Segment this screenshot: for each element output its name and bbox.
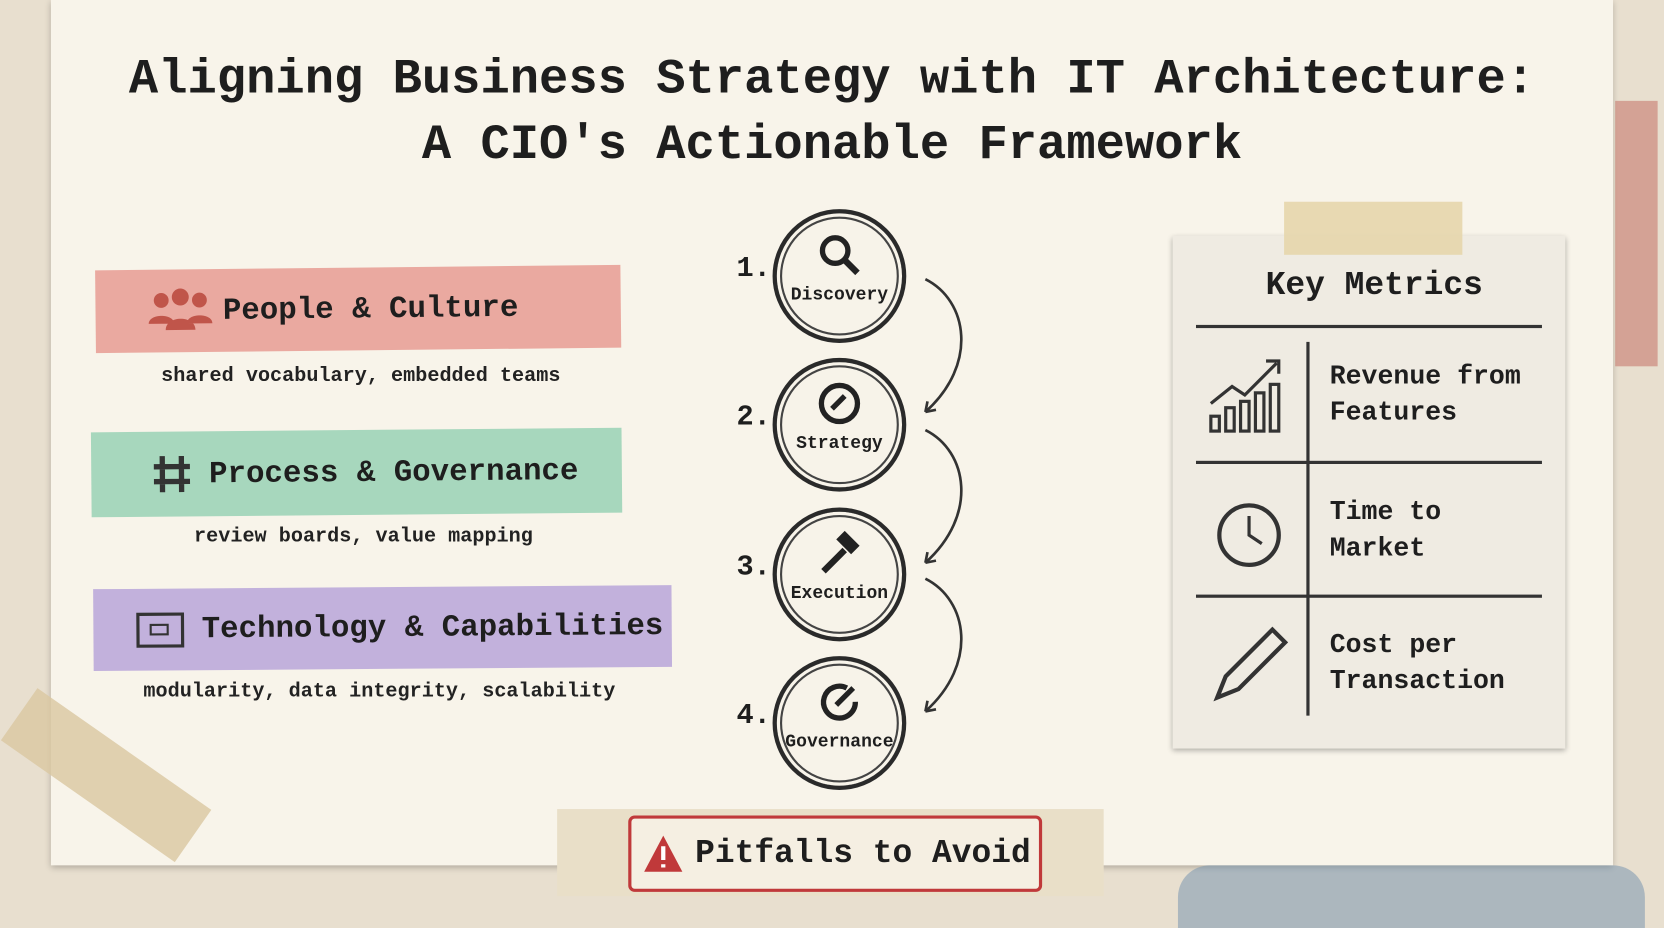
panel: people & culture <box>95 265 621 353</box>
metric: time <box>1217 497 1441 567</box>
step 3 execution: Execution <box>791 584 888 604</box>
process steps <box>736 209 963 790</box>
metric: revenue <box>1209 359 1521 433</box>
panel: process & governance <box>91 428 622 517</box>
callout: pitfalls: Pitfalls to Avoid <box>695 835 1031 872</box>
step 2 strategy: 2. <box>736 402 771 434</box>
step 1 discovery: 1. <box>736 254 771 286</box>
decorative stains <box>1615 101 1658 366</box>
step 2 strategy: Strategy <box>796 434 883 454</box>
step 3 execution: 3. <box>736 552 771 584</box>
panel: technology <box>93 585 672 671</box>
step 4 governance: 4. <box>736 701 771 733</box>
text: technology subtitle: modularity, data integrity, scalability <box>143 680 615 703</box>
panel: key metrics <box>1173 236 1565 749</box>
title: A CIO's Actionable Framework <box>422 118 1242 173</box>
step 4 governance: Governance <box>785 733 894 753</box>
metric: time: Time to <box>1330 497 1441 528</box>
metric: cost: Transaction <box>1330 666 1505 697</box>
metric: time: Market <box>1330 533 1425 564</box>
panel: process & governance: Process & Governance <box>209 453 579 491</box>
icon: server <box>136 612 184 648</box>
text: people subtitle: shared vocabulary, embedded teams <box>161 364 560 388</box>
metric: cost <box>1214 626 1505 702</box>
title <box>128 52 1535 173</box>
icon: warning <box>644 836 682 872</box>
panel: people & culture: People & Culture <box>223 290 519 328</box>
step 1 discovery <box>736 209 906 343</box>
step 4 governance <box>736 656 906 790</box>
heading: key metrics: Key Metrics <box>1266 268 1483 305</box>
metric: revenue: Features <box>1330 397 1457 428</box>
tape <box>1284 202 1462 255</box>
text: process subtitle: review boards, value mapping <box>194 525 533 548</box>
icon: arrows <box>154 456 190 492</box>
step 1 discovery: Discovery <box>791 286 888 306</box>
panel: technology: Technology & Capabilities <box>202 609 663 647</box>
icon: people <box>148 288 212 330</box>
step 3 execution <box>736 508 906 642</box>
arrows <box>924 278 963 713</box>
callout: pitfalls <box>557 809 1104 896</box>
metric: revenue: Revenue from <box>1330 361 1521 392</box>
step 2 strategy <box>736 358 906 492</box>
title: Aligning Business Strategy with IT Architecture: <box>129 52 1535 107</box>
metric: cost: Cost per <box>1330 630 1457 660</box>
